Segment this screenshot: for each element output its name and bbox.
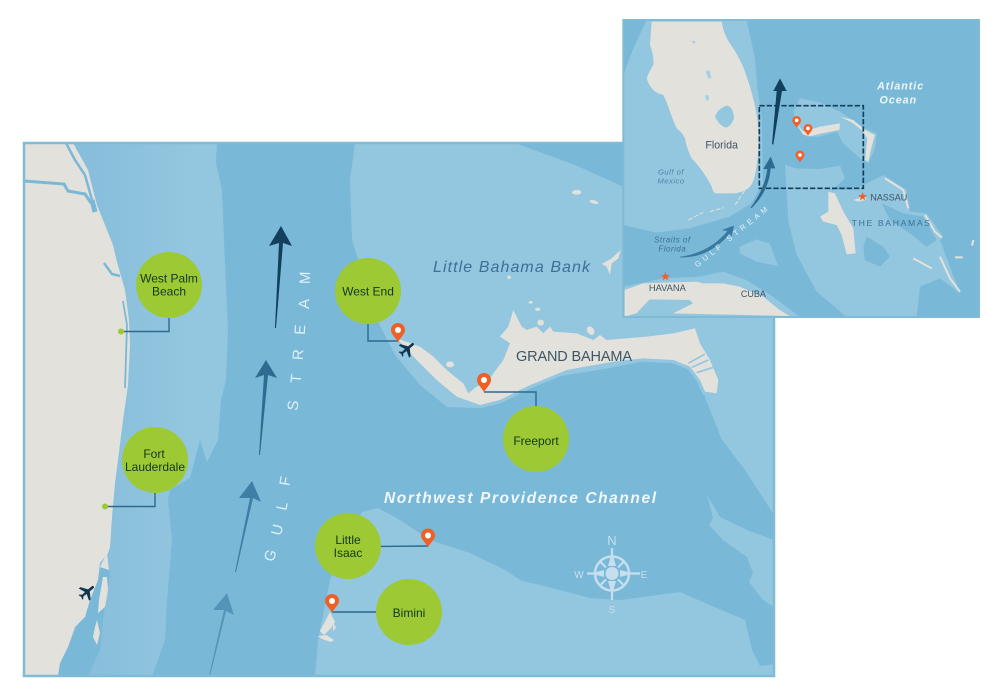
icon: plane West End bbox=[398, 342, 414, 358]
label: Gulf Stream: M bbox=[297, 271, 314, 284]
pin: Freeport bbox=[477, 373, 491, 392]
callout: Fort Lauderdale bbox=[122, 427, 188, 493]
inset label: The Bahamas: THE BAHAMAS bbox=[852, 218, 930, 228]
main map border bbox=[24, 143, 774, 676]
Cuba shelf bbox=[623, 272, 800, 317]
callout: Bimini: Bimini bbox=[393, 606, 425, 620]
marker: Fort Lauderdale dot bbox=[102, 504, 108, 510]
inset label: Gulf Stream: GULF STREAM bbox=[693, 203, 772, 269]
deep water: Gulf Stream and Northwest Providence Channel bbox=[152, 143, 774, 676]
shallow water background bbox=[24, 143, 774, 676]
land: Abaco bbox=[840, 117, 875, 162]
land: Florida coast bbox=[24, 143, 130, 676]
label: Little Bahama Bank: Little Bahama Bank bbox=[433, 259, 591, 276]
callout: Little Isaac bbox=[315, 513, 381, 579]
inset arrows bbox=[680, 78, 787, 257]
label: Gulf Stream: U bbox=[268, 523, 287, 537]
inset pin: Bimini bbox=[796, 151, 804, 162]
inset pin: West End bbox=[792, 116, 801, 128]
label: Gulf Stream bbox=[264, 272, 310, 560]
cays bbox=[446, 190, 621, 367]
inset label: Straits of Florida: Straits of bbox=[654, 235, 691, 244]
label: Gulf Stream: S bbox=[285, 400, 303, 411]
label: Gulf Stream: L bbox=[273, 500, 292, 512]
callout: Bimini bbox=[376, 579, 442, 645]
land: Grand Bahama bbox=[397, 190, 718, 405]
star: Nassau: ★ bbox=[857, 190, 868, 204]
icon: compass rose: W bbox=[574, 570, 584, 581]
pin: Bimini bbox=[325, 594, 339, 612]
deep water: northeast corner bbox=[515, 143, 624, 187]
land: Nassau bbox=[853, 197, 867, 202]
land: Cuba bbox=[625, 282, 790, 317]
land: Florida bbox=[647, 22, 759, 193]
label: Gulf Stream: R bbox=[290, 349, 307, 361]
icon: compass rose: E bbox=[641, 570, 648, 581]
label: Northwest Providence Channel: Northwest Providence Channel bbox=[384, 490, 657, 507]
callout: West Palm Beach: West Palm bbox=[140, 272, 198, 286]
inset label: Havana: HAVANA bbox=[649, 283, 687, 293]
callout: Fort Lauderdale: Fort bbox=[143, 447, 165, 461]
callout: Freeport: Freeport bbox=[513, 434, 559, 448]
pin: Little Isaac bbox=[421, 528, 435, 547]
callout: Little Isaac: Isaac bbox=[334, 546, 362, 560]
callout: West Palm Beach bbox=[136, 252, 202, 318]
light fringe bbox=[478, 359, 704, 408]
Florida Keys bbox=[688, 185, 748, 220]
Great Bahama Bank shelf bbox=[785, 165, 960, 317]
inset label: Gulf of Mexico: Gulf of bbox=[658, 167, 684, 176]
dashed locator frame bbox=[759, 106, 863, 188]
gulf stream arrows bbox=[209, 226, 292, 676]
label: Gulf Stream: T bbox=[288, 373, 305, 384]
callout: Freeport bbox=[503, 406, 569, 472]
Gulf shelf and Florida shelf bbox=[623, 20, 763, 233]
label: Grand Bahama: GRAND BAHAMA bbox=[516, 349, 632, 365]
land: Grand Bahama bbox=[797, 123, 840, 136]
panel: main map bbox=[24, 143, 774, 676]
leader lines bbox=[105, 316, 536, 612]
inset label: Gulf of Mexico: Mexico bbox=[657, 176, 685, 185]
callout: West End: West End bbox=[342, 284, 394, 298]
icon: plane Fort Lauderdale bbox=[78, 586, 94, 601]
Florida lakes bbox=[691, 41, 711, 100]
inset label: Atlantic Ocean: Ocean bbox=[880, 94, 917, 106]
Cay Sal Bank bbox=[740, 239, 778, 266]
label: Gulf Stream: G bbox=[261, 547, 281, 564]
inset label: Florida: Florida bbox=[705, 139, 738, 151]
panel: inset locator map bbox=[623, 20, 979, 317]
pin: West End bbox=[391, 323, 405, 342]
barrier islands bbox=[93, 553, 109, 645]
icon: compass rose: S bbox=[609, 605, 616, 616]
icon: compass rose: N bbox=[607, 533, 617, 548]
marker: West Palm Beach dot bbox=[118, 328, 124, 334]
inset border bbox=[623, 20, 979, 317]
water inlets along the coast bbox=[24, 143, 127, 388]
inset label: Straits of Florida: Florida bbox=[658, 244, 686, 253]
land: Bimini bbox=[318, 612, 336, 642]
label: Gulf Stream: A bbox=[296, 299, 313, 309]
near-shore shading bbox=[60, 144, 120, 674]
callout: West End bbox=[335, 258, 401, 324]
shallow bank east of the channel bbox=[707, 495, 774, 607]
callout: Fort Lauderdale: Lauderdale bbox=[125, 460, 185, 474]
inset pin: Freeport bbox=[804, 124, 812, 136]
star: Havana: ★ bbox=[660, 269, 671, 283]
land: outer islands bbox=[885, 178, 973, 292]
southern lagoon bbox=[58, 566, 110, 675]
inset label: Atlantic Ocean: Atlantic bbox=[876, 80, 924, 92]
deep pockets bbox=[863, 203, 937, 267]
Little Bahama Bank shelf bbox=[793, 98, 877, 163]
label: Gulf Stream: E bbox=[292, 324, 309, 335]
label: Gulf Stream: F bbox=[276, 475, 295, 487]
Lake Okeechobee bbox=[715, 106, 734, 128]
callout: West Palm Beach: Beach bbox=[152, 284, 186, 298]
inset label: Cuba: CUBA bbox=[741, 289, 766, 299]
callout: Little Isaac: Little bbox=[335, 533, 361, 547]
land: Andros bbox=[820, 192, 856, 254]
inset label: Nassau: NASSAU bbox=[870, 192, 907, 202]
icon: compass rose bbox=[574, 533, 648, 616]
